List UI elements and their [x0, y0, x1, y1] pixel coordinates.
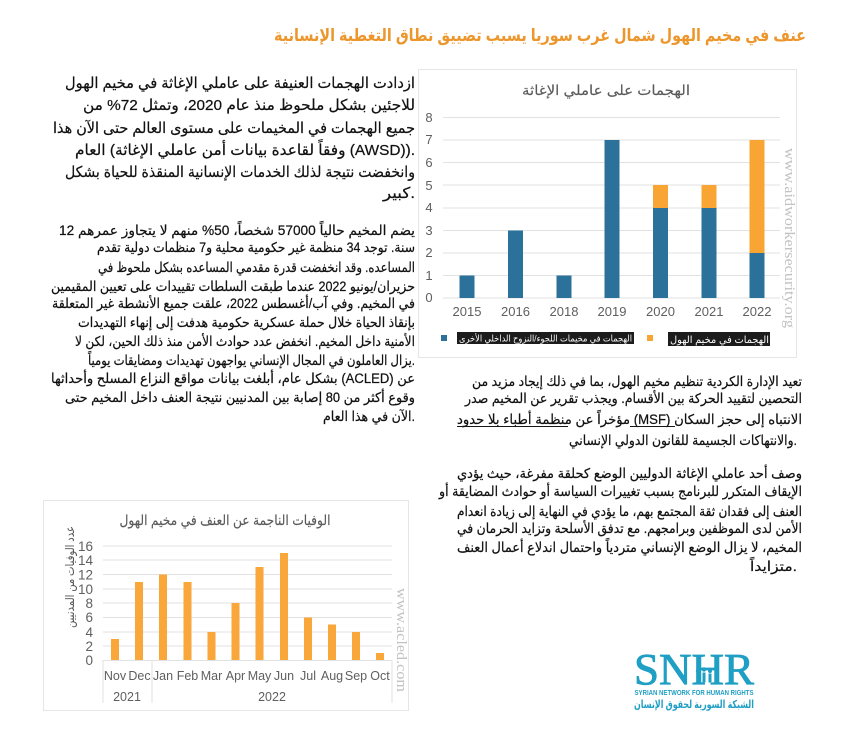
gridlines and y axis: 5	[425, 178, 433, 193]
text block: camp situation paragraph: بإنقاذ الحياة خلال حملة عسكرية حكومية هدفت إلى إنهاء التهديدات	[78, 315, 415, 331]
gridlines and y axis: 2	[85, 639, 93, 654]
x axis months and years: Mar	[201, 669, 222, 683]
text block: camp situation paragraph: حزيران/يونيو 2022 عندما طبقت السلطات تقييدات على تعيين المقيمين	[51, 279, 415, 295]
text block: camp situation paragraph: سنة. توجد 34 منظمة غير حكومية محلية و7 منظمات دولية تقدم	[97, 240, 415, 256]
text block: Kurdish administration paragraph: الانتباه إلى حجز السكان (MSF) مؤخراً عن منظمة أطباء بلا حدود	[457, 409, 802, 428]
gridlines and y axis: 8	[85, 596, 93, 611]
x axis months and years: Dec	[128, 669, 151, 683]
x axis months and years: Oct	[370, 669, 390, 683]
x axis months and years: 2022	[258, 690, 286, 704]
text block: Kurdish administration paragraph: .والانتهاكات الجسيمة للقانون الدولي الإنساني	[569, 433, 797, 449]
chart title: deaths from violence in al-Hol: الوفيات الناجمة عن العنف في مخيم الهول	[120, 512, 330, 529]
gridlines and y axis: 14	[78, 553, 93, 568]
text block: aid worker testimony paragraph: الإيقاف المتكرر للبرنامج بسبب تغييرات السياسة أو حوادث المضايقة أو	[438, 482, 802, 500]
text block: intro paragraph: ازدادت الهجمات العنيفة على عاملي الإغاثة في مخيم الهول	[65, 75, 415, 93]
x axis years: 2020	[646, 304, 675, 319]
text block: camp situation paragraph: وقوع أكثر من 80 إصابة بين المدنيين نتيجة العنف داخل المخيم حتى	[65, 388, 415, 406]
gridlines and y axis: 2	[425, 245, 433, 260]
gridlines and y axis: 16	[78, 539, 93, 554]
text block: camp situation paragraph: عن (ACLED) بشكل عام، أبلغت بيانات مواقع النزاع المسلح وأحداثها	[51, 369, 415, 387]
text block: Kurdish administration paragraph: التحصين لتقييد الحركة بين الأقسام. ويجذب تقرير عن المخيم صدر	[464, 390, 802, 407]
text block: intro paragraph: جميع الهجمات في المخيمات على مستوى العالم حتى الآن هذا	[53, 120, 415, 138]
text block: intro paragraph: وانخفضت نتيجة لذلك الخدمات الإنسانية المنقذة للحياة بشكل	[65, 164, 415, 181]
gridlines and y axis	[425, 110, 780, 305]
text block: intro paragraph	[53, 75, 415, 202]
gridlines and y axis: 10	[78, 582, 93, 597]
gridlines and y axis: 4	[85, 625, 93, 640]
icon: people in logo	[696, 667, 712, 682]
gridlines and y axis: 7	[425, 132, 433, 147]
text block: aid worker testimony paragraph	[438, 464, 802, 575]
watermark: acled: www.acled.com	[393, 588, 409, 693]
x axis years: 2015	[453, 304, 481, 319]
text block: aid worker testimony paragraph: وصف أحد عاملي الإغاثة الدوليين الوضع كحلقة مفرغة، حيث يؤدي	[457, 464, 802, 482]
watermark: aidworkersecurity: www.aidworkersecurity.org	[781, 148, 797, 328]
legend	[441, 332, 770, 346]
text block: camp situation paragraph: يضم المخيم حالياً 57000 شخصاً، 50% منهم لا يتجاوز عمرهم 12	[59, 220, 415, 239]
panel: aid worker attacks chart	[418, 70, 797, 358]
gridlines and y axis: 0	[425, 290, 433, 305]
text block: camp situation paragraph: .يزال العاملون في المجال الإنساني يواجهون تهديدات ومضايقات يومياً	[88, 350, 415, 369]
x axis months and years: Jun	[274, 669, 294, 683]
stacked bars	[460, 140, 764, 298]
gridlines and y axis: 1	[425, 268, 433, 283]
gridlines and y axis: 12	[78, 568, 93, 582]
text block: Kurdish administration paragraph: تعيد الإدارة الكردية تنظيم مخيم الهول، بما في ذلك إيجاد مزيد من	[472, 374, 802, 390]
x axis months and years: May	[248, 669, 272, 683]
text block: camp situation paragraph: .الآن في هذا العام	[323, 409, 415, 424]
text block: Kurdish administration paragraph	[457, 374, 802, 449]
text block: intro paragraph: .((AWSD) وفقاً لقاعدة بيانات أمن عاملي الإغاثة) العام	[75, 139, 415, 160]
text block: camp situation paragraph: في المخيم. وفي آب/أغسطس 2022، علقت جميع الأنشطة غير المتعلقة	[52, 294, 415, 312]
x axis months and years: Aug	[321, 669, 343, 683]
x axis years: 2022	[743, 304, 771, 319]
logo: SNHR: الشبكة السورية لحقوق الإنسان	[634, 699, 754, 711]
gridlines and y axis: 8	[425, 110, 433, 125]
panel: violence deaths chart	[44, 500, 409, 710]
x axis months and years: Apr	[226, 669, 245, 683]
gridlines and y axis	[78, 539, 392, 703]
legend: الهجمات في مخيم الهول	[670, 335, 769, 346]
x axis months and years: Jan	[153, 669, 173, 683]
gridlines and y axis: 0	[85, 653, 93, 668]
legend: الهجمات في مخيمات اللجوء/النزوح الداخلي الأخرى	[459, 332, 632, 344]
x axis years: 2021	[695, 304, 723, 319]
x axis months and years: 2021	[113, 690, 141, 704]
x axis years: 2019	[598, 304, 626, 319]
x axis months and years: Nov	[104, 669, 127, 683]
x axis months and years	[104, 669, 390, 704]
chart title: attacks on aid workers: الهجمات على عاملي الإغاثة	[522, 82, 690, 99]
x axis years: 2016	[501, 304, 530, 319]
text block: intro paragraph: .كبير	[382, 185, 415, 202]
text block: camp situation paragraph: الأمنية داخل المخيم. انخفض عدد حوادث الأمن منذ ذلك الحين، لكن لا	[75, 333, 415, 350]
gridlines and y axis: 3	[425, 223, 433, 238]
y axis label: عدد الوفيات من المدنيين	[63, 526, 78, 628]
x axis years	[453, 304, 771, 319]
gridlines and y axis: 6	[85, 610, 93, 625]
text block: aid worker testimony paragraph: العنف إلى فقدان ثقة المجتمع بهم، ما يؤدي في النهاية إلى زيادة انعدام	[457, 504, 802, 520]
logo: SNHR: SNHR	[634, 645, 755, 694]
text block: camp situation paragraph	[51, 220, 415, 424]
text block: aid worker testimony paragraph: المخيم، لا يزال الوضع الإنساني متردياً واحتمال اندلاع أعمال العنف	[457, 537, 802, 556]
text block: aid worker testimony paragraph: .متزايداً	[749, 556, 797, 575]
x axis months and years: Jul	[300, 669, 316, 683]
logo: SNHR: SYRIAN NETWORK FOR HUMAN RIGHTS	[634, 688, 754, 697]
x axis months and years: Sep	[345, 669, 367, 683]
text block: aid worker testimony paragraph: الأمن لدى الموظفين وبرامجهم. مع تدفق الأسلحة وتزايد الحرمان في	[457, 520, 802, 537]
gridlines and y axis: 6	[425, 155, 433, 170]
text block: camp situation paragraph: المساعده. وقد انخفضت قدرة مقدمي المساعده بشكل ملحوظ في	[98, 260, 415, 276]
text block: intro paragraph: للاجئين بشكل ملحوظ منذ عام 2020، وتمثل 72% من	[83, 97, 415, 114]
x axis years: 2018	[550, 304, 578, 319]
gridlines and y axis: 4	[425, 200, 433, 215]
monthly bars	[111, 553, 384, 660]
x axis months and years: Feb	[177, 669, 198, 683]
